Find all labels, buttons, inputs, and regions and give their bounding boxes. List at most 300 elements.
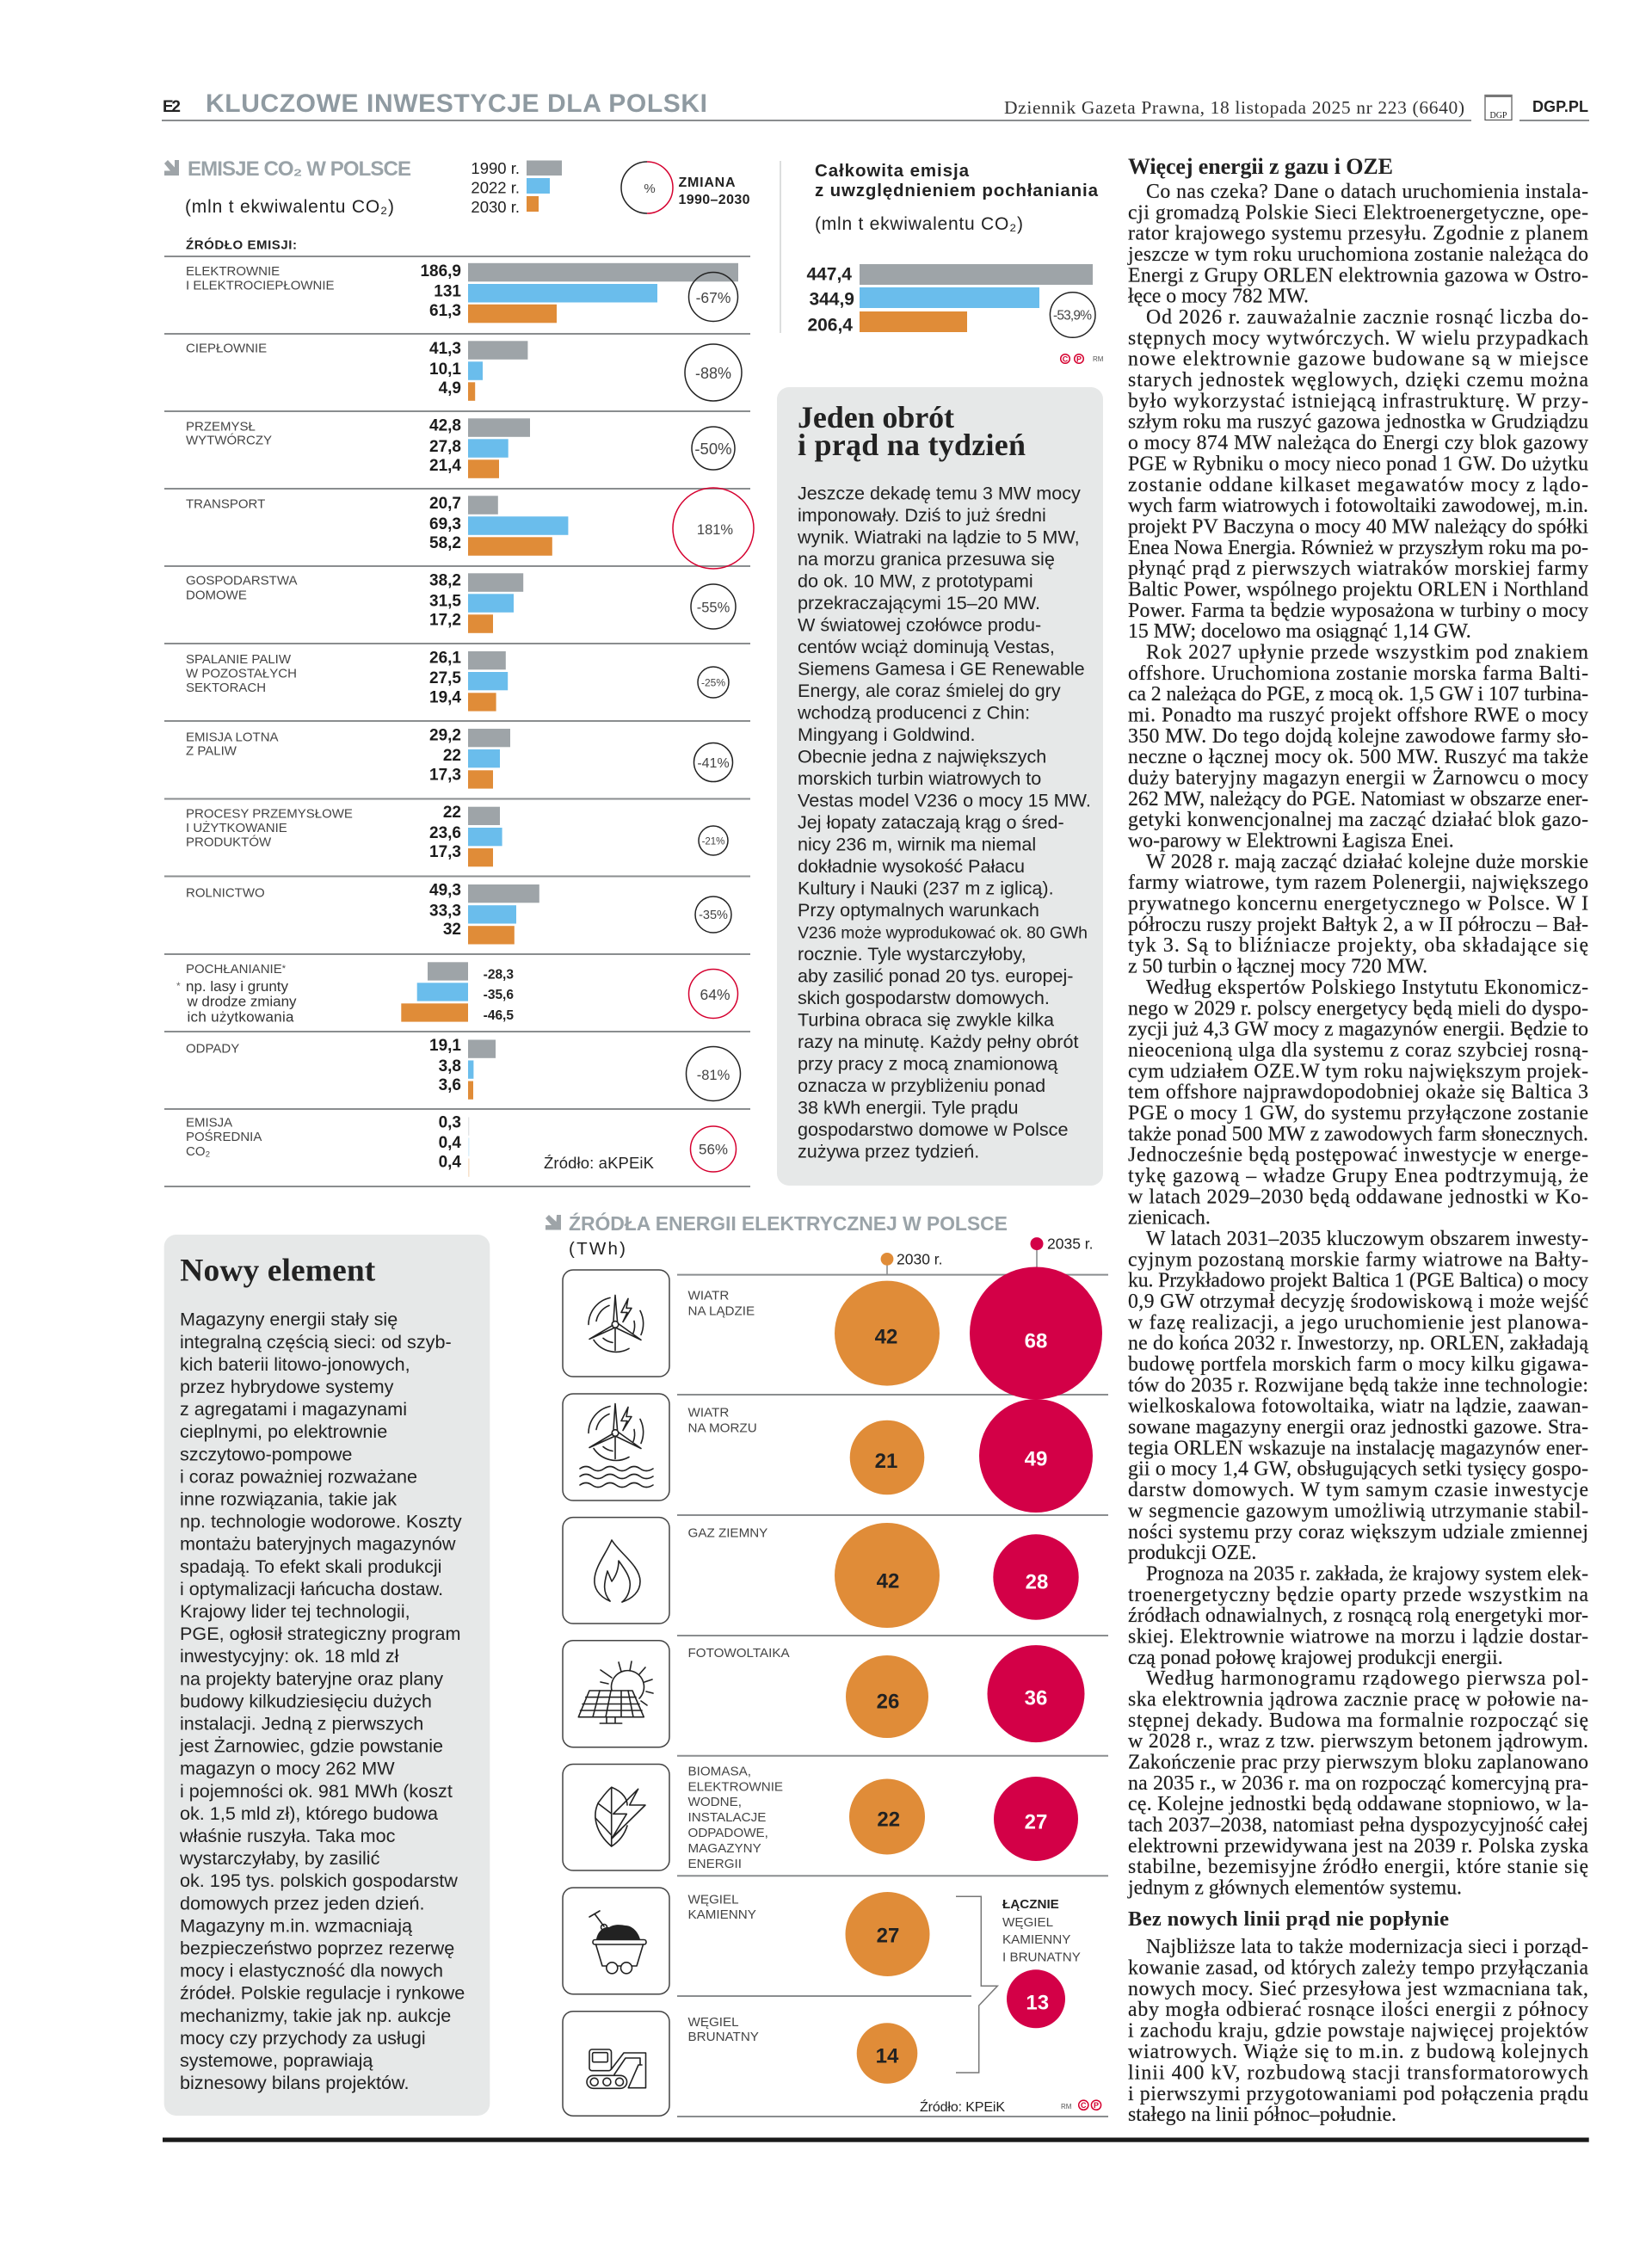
page header: DGP [1489, 111, 1507, 120]
article text: offshore. Uruchomiona zostanie morska farma Balti- [1128, 662, 1588, 685]
row labels: sources: GAZ ZIEMNY [688, 1526, 767, 1540]
row: przemysl: 42,8 [429, 417, 461, 435]
text: Nowy element body: na projekty bateryjne oraz plany [180, 1667, 443, 1689]
panel: Nowy element [164, 1235, 490, 2116]
article text: duży bateryjny magazyn energii w Żarnowcu o mocy [1128, 767, 1588, 790]
text: Nowy element body: i coraz poważniej rozważane [180, 1465, 417, 1487]
heading: total emission: Całkowita emisja [815, 161, 970, 181]
row: cieplownie: -88% [695, 365, 731, 382]
row: cieplownie: 10,1 [429, 360, 461, 379]
text: Jeden obrot body: Jeszcze dekadę temu 3 MW mocy [798, 483, 1081, 504]
legend: years [471, 159, 562, 216]
article text: mi. Ponadto ma ruszyć projekt offshore RWE o mocy [1128, 704, 1588, 726]
row labels: sources: BRUNATNY [688, 2030, 759, 2044]
article text: w fazę realizacji, a jego uruchomienie jest planowa- [1128, 1311, 1588, 1334]
bracket: coal total [956, 1896, 1081, 2073]
article text: ku. Przykładowo projekt Baltica 1 (PGE Baltica) o mocy [1128, 1270, 1588, 1292]
row: emisja lotna: 29,2 [429, 726, 461, 745]
text: Nowy element body: bezpieczeństwo poprzez rezerwę [180, 1938, 454, 1958]
row: pochlanianie: * [282, 964, 287, 974]
copyright marks: RM [1061, 2103, 1072, 2111]
article text: w latach 2029–2030 będą oddawane jednostki w Ko- [1128, 1186, 1588, 1208]
text: Jeden obrot body: centów wciąż dominują Vestas, [798, 636, 1055, 657]
article text: tykę gazową – władze Grupy Enea podtrzymują, że [1128, 1165, 1588, 1187]
article text: farmy wiatrowe, tym razem Polenergii, największego [1128, 872, 1588, 894]
article text: Energi z Grupy ORLEN elektrownia gazowa w Ostro- [1128, 264, 1588, 287]
article text: final section: Najbliższe lata to także modernizacja sieci i porząd- [1146, 1936, 1588, 1958]
row: rolnictwo: 33,3 [429, 902, 461, 921]
article text: final section: i pierwszymi przygotowaniami pod połączenia prądu [1128, 2083, 1588, 2105]
panel: CO2 emissions in Poland [164, 157, 754, 1186]
article text: skiej. Elektrownie wiatrowe na morzu i lądzie dostar- [1128, 1626, 1588, 1648]
legend: 2035 [1031, 1235, 1094, 1268]
article text: łęce o mocy 782 MW. [1128, 286, 1309, 308]
page header: DGP.PL [1532, 98, 1588, 115]
article text: 350 MW. Do tego dojdą kolejne zawodowe farmy sło- [1128, 725, 1588, 748]
text: Nowy element body: inne rozwiązania, takie jak [180, 1488, 397, 1509]
article text: final section: wiatrowych. Wiąże się to m.in. z budową kolejnych [1128, 2041, 1588, 2063]
text: Nowy element body: jest Żarnowiec, gdzie powstanie [179, 1735, 443, 1757]
row labels: sources: WĘGIEL [688, 1893, 739, 1907]
text: Nowy element body: systemowe, poprawiają [180, 2049, 373, 2071]
legend: 2030: 2030 r. [897, 1251, 943, 1268]
article text: troenergetyczny będzie oparty przede wszystkim na [1128, 1584, 1588, 1606]
copyright marks [1061, 354, 1104, 363]
text: Nowy element body: i optymalizacji łańcucha dostaw. [180, 1578, 443, 1599]
article text: czą ponad połowę krajowej produkcji energii. [1128, 1647, 1503, 1669]
row: odpady: 19,1 [429, 1037, 461, 1055]
row: pochlanianie [176, 962, 738, 1026]
text: Nowy element body: ok. 1,5 mld zł), którego budowa [180, 1802, 439, 1824]
row: odpady: 3,8 [439, 1057, 461, 1075]
icon: biomass leaf and bolt [563, 1764, 669, 1870]
text: Jeden obrot body: nicy 236 m, wirnik ma niemal [798, 834, 1036, 855]
row: elektrownie: ELEKTROWNIE [186, 264, 280, 279]
row: elektrownie: I ELEKTROCIEPŁOWNIE [186, 278, 335, 293]
row: emisja posrednia [186, 1113, 737, 1177]
row: procesy przemyslowe: PRODUKTÓW [186, 835, 272, 850]
change circle: -53,9% [1053, 308, 1092, 324]
article text: było wykorzystać istniejącą infrastrukturę. W przy- [1128, 390, 1588, 412]
row: elektrownie [186, 262, 738, 323]
page header: E2 [163, 98, 181, 116]
article text: tem offshore najprawdopodobniej okaże się Baltica 3 [1128, 1081, 1588, 1104]
row: cieplownie: 4,9 [439, 379, 461, 397]
row: przemysl: -50% [694, 440, 732, 458]
row: spalanie paliw: W POZOSTAŁYCH [186, 666, 297, 681]
row: pochlanianie: * [176, 980, 181, 992]
row: pochlanianie: w drodze zmiany [186, 993, 297, 1010]
article text: getyki konwencjonalnej ma zacząć działać blok gazo- [1128, 809, 1588, 831]
bars: total [806, 264, 1093, 336]
article text: jednym z głównych elementów systemu. [1127, 1877, 1462, 1900]
text: Jeden obrot body: oznacza w przybliżeniu ponad [798, 1075, 1045, 1096]
text: Jeden obrot body: razy na minutę. Każdy pełny obrót [798, 1031, 1078, 1052]
bubbles: 2030: 21 [875, 1450, 897, 1473]
row: przemysl: PRZEMYSŁ [186, 420, 256, 434]
row: gospodarstwa domowe: -55% [697, 601, 730, 616]
row: emisja lotna: 22 [443, 747, 461, 765]
text: Nowy element body: z agregatami i magazynami [180, 1398, 407, 1420]
article text: wielkoskalowa fotowoltaika, wiatr na lądzie, zaawan- [1128, 1396, 1588, 1418]
row labels: sources: WĘGIEL [688, 2015, 739, 2030]
row labels: sources: ENERGII [688, 1857, 742, 1871]
bracket: coal total: ŁĄCZNIE [1002, 1897, 1059, 1912]
row: transport: 58,2 [429, 534, 461, 552]
article text: cym udziałem OZE.W tym roku największym projek- [1128, 1060, 1588, 1082]
article text: produkcji OZE. [1128, 1542, 1256, 1564]
article text: ca 2 należąca do PGE, z mocą ok. 1,5 GW i 107 turbina- [1128, 683, 1588, 706]
icon: natural gas flame [563, 1518, 669, 1624]
text: Nowy element body: mechanizmy, takie jak np. aukcje [180, 2005, 451, 2026]
article text: W 2028 r. mają zacząć działać kolejne duże morskie [1146, 851, 1588, 873]
article text: W latach 2031–2035 kluczowym obszarem inwesty- [1146, 1228, 1588, 1250]
legend: years: 2022 r. [471, 179, 520, 196]
article text: wo-parowy w Elektrowni Łagisza Enei. [1128, 829, 1454, 852]
row: emisja lotna: -41% [697, 756, 730, 771]
text: Jeden obrot body: 38 kWh energii. Tyle prądu [798, 1097, 1018, 1118]
article text: final section: i zachodu kraju, gdzie powstaje najwięcej projektów [1128, 2020, 1589, 2043]
article text: Od 2026 r. zauważalnie zacznie rosnąć liczba do- [1146, 306, 1588, 329]
bracket: coal total: WĘGIEL [1002, 1915, 1053, 1930]
article text: PGE w Rybniku o mocy nieco ponad 1 GW. Do użytku [1128, 453, 1588, 475]
article text: tegia ORLEN wskazuje na instalację magazynów ener- [1128, 1437, 1588, 1459]
bubbles: 2035: 28 [1026, 1571, 1048, 1593]
article text: Enea Nowa Energia. Również w przyszłym roku ma po- [1128, 537, 1588, 559]
row: przemysl: WYTWÓRCZY [186, 434, 272, 447]
row: cieplownie [186, 340, 742, 401]
text: Nowy element body: ok. 195 tys. polskich gospodarstw [180, 1870, 458, 1891]
article text: 15 MW; docelowo ma osiągnąć 1,14 GW. [1128, 620, 1471, 643]
text: Nowy element body: źródeł. Polskie regulacje i rynkowe [180, 1982, 465, 2004]
row: emisja posrednia: POŚREDNIA [186, 1129, 262, 1144]
article text: 0,9 GW otrzymał decyzję środowiskową i może wejść [1128, 1291, 1588, 1313]
row labels: sources: BIOMASA, [688, 1764, 751, 1779]
article text: ne do końca 2032 r. Inwestorzy, np. ORLEN, zakładają [1128, 1333, 1588, 1355]
text: Nowy element body: np. technologie wodorowe. Koszty [180, 1511, 462, 1532]
heading: Jeden obrot: i prąd na tydzień [798, 428, 1026, 462]
row: procesy przemyslowe: PROCESY PRZEMYSŁOWE [186, 807, 353, 821]
article text: zycji już 4,3 GW mocy z magazynów energii. Będzie to [1128, 1019, 1588, 1041]
text: Nowy element body: mocy i elastyczność dla nowych [180, 1960, 443, 1981]
row: transport: TRANSPORT [186, 497, 265, 511]
row: cieplownie: 41,3 [429, 340, 461, 358]
article text: w 2028 r., wraz z tzw. pierwszym betonem jądrowym. [1128, 1730, 1588, 1753]
bubbles: 2035 [970, 1266, 1102, 2028]
article text: Prognoza na 2035 r. zakłada, że krajowy system elek- [1146, 1562, 1588, 1585]
article text: nego w 2029 r. polscy energetycy będą mieli do dyspo- [1128, 997, 1588, 1020]
row: elektrownie: 131 [434, 282, 461, 301]
text: Nowy element body: montażu bateryjnych magazynów [180, 1533, 456, 1555]
text: Jeden obrot body: Mingyang i Goldwind. [798, 724, 975, 745]
row labels: sources: ELEKTROWNIE [688, 1779, 783, 1794]
article text: w segmencie gazowym umożliwią utrzymanie stabil- [1128, 1500, 1588, 1522]
article text: neczne o łącznej mocy ok. 500 MW. Ruszyć ma także [1128, 746, 1588, 768]
row: spalanie paliw: 27,5 [429, 669, 461, 687]
row: transport: 69,3 [429, 515, 461, 533]
article text: final section: linii 400 kV, rozbudową stacji transformatorowych [1128, 2061, 1588, 2084]
article text: tów do 2035 r. Rozwijane będą także inne technologie: [1128, 1374, 1588, 1396]
article text: stępnych mocy wytwórczych. W wielu przypadkach [1128, 327, 1588, 349]
row: spalanie paliw: SEKTORACH [186, 681, 266, 695]
row: procesy przemyslowe: 17,3 [429, 843, 461, 861]
text: Nowy element body: Krajowy lider tej technologii, [180, 1600, 410, 1622]
article text: zienicach. [1128, 1207, 1211, 1229]
legend: percent change: % [644, 182, 656, 196]
row: spalanie paliw: SPALANIE PALIW [186, 652, 292, 667]
row: procesy przemyslowe: 22 [443, 804, 461, 822]
article text: 262 MW, należący do PGE. Natomiast w obszarze ener- [1128, 788, 1588, 810]
bubbles: 2030: 22 [877, 1809, 900, 1831]
row: pochlanianie: 64% [700, 986, 730, 1003]
text: Jeden obrot body: skich gospodarstw domowych. [798, 987, 1050, 1008]
article text: final section [1128, 1936, 1589, 2126]
heading: emissions: EMISJE CO₂ W POLSCE [188, 157, 411, 181]
heading: Jeden obrot [798, 400, 1026, 462]
row: pochlanianie: -35,6 [484, 988, 514, 1002]
change circle [1050, 293, 1095, 337]
bubbles: 2035: 27 [1025, 1810, 1047, 1834]
bubbles: 2030: 27 [877, 1924, 899, 1948]
text: Jeden obrot body: morskich turbin wiatrowych to [798, 767, 1041, 789]
article text: także ponad 500 MW z zawodowych farm słonecznych. [1128, 1123, 1588, 1145]
row: emisja posrednia: 0,4 [439, 1154, 461, 1172]
text: Nowy element body: i pojemności ok. 981 MWh (koszt [180, 1780, 453, 1802]
row: procesy przemyslowe: I UŻYTKOWANIE [186, 820, 287, 835]
article text: stępnej dekady. Budowa ma formalnie rozpocząć się [1128, 1710, 1588, 1732]
article text: cę. Kolejne jednostki będą oddawane stopniowo, w la- [1128, 1793, 1588, 1815]
article heading: Więcej energii z gazu i OZE [1128, 154, 1393, 179]
row labels: sources: ODPADOWE, [688, 1826, 768, 1840]
row labels: sources: FOTOWOLTAIKA [688, 1646, 791, 1661]
heading: total emission: z uwzględnieniem pochłaniania [815, 181, 1099, 200]
copyright marks [1061, 2100, 1101, 2111]
article text: final section: kowanie zasad, od których zależy tempo przyłączania [1128, 1956, 1588, 1979]
article text: final section: nowych mocy. Sieć przesyłowa jest wzmacniana tak, [1128, 1978, 1588, 2000]
text: Nowy element body: spadają. To efekt skali produkcji [180, 1556, 441, 1577]
row: odpady: 3,6 [439, 1076, 461, 1094]
row: transport: 20,7 [429, 495, 461, 513]
text: Nowy element body: mocy czy przychody za usługi [180, 2027, 426, 2049]
article text: budowę portfela morskich farm o mocy kilku gigawa- [1128, 1353, 1588, 1376]
copyright marks: P [1076, 354, 1082, 363]
icon: coal cart [563, 1888, 669, 1994]
text: Nowy element body: kich baterii litowo-jonowych, [180, 1353, 410, 1375]
panel: electricity sources [546, 1211, 1108, 2117]
article text: z 50 turbin o łącznej mocy 720 MW. [1128, 956, 1427, 978]
article text: sowane magazyny energii oraz jednostki gazowe. Stra- [1128, 1416, 1588, 1439]
text: Nowy element body: przez hybrydowe systemy [180, 1376, 394, 1397]
text: Jeden obrot body: Jej łopaty zataczają krąg o śred- [798, 811, 1064, 833]
text: Jeden obrot body: aby zasilić ponad 20 tys. europej- [798, 965, 1074, 987]
legend: percent change: 1990–2030 [678, 193, 750, 207]
page header: KLUCZOWE INWESTYCJE DLA POLSKI [206, 89, 707, 118]
bubbles: 2030: 26 [877, 1690, 899, 1714]
text: Jeden obrot body: przekraczającymi 15–20 MW. [798, 592, 1040, 613]
text: Nowy element body: instalacji. Jedną z pierwszych [180, 1712, 423, 1735]
text: Jeden obrot body: Energy, ale coraz śmielej do gry [798, 680, 1061, 701]
text: Nowy element body: wystarczyłaby, by zasilić [179, 1847, 380, 1869]
row labels: sources: KAMIENNY [688, 1907, 756, 1922]
text: Jeden obrot body: przy pracy z mocą znamionową [798, 1053, 1058, 1075]
article text: szłym roku ma ruszyć gazowa jednostka w Grudziądzu [1128, 411, 1588, 434]
row: emisja posrednia: EMISJA [186, 1115, 232, 1131]
article text: final section: aby mogła odbierać rosnące ilości energii z północy [1128, 1999, 1588, 2021]
row: gospodarstwa domowe: DOMOWE [186, 588, 247, 602]
bubbles: 2035: 13 [1026, 1991, 1049, 2015]
row: odpady: -81% [697, 1068, 730, 1083]
text: Nowy element body: domowych przez jeden dzień. [180, 1892, 424, 1913]
panel: Jeden obrot [777, 387, 1103, 1186]
text: Nowy element body: inwestycyjny: ok. 18 mld zł [180, 1645, 399, 1667]
text: Jeden obrot body: imponowały. Dziś to już średni [798, 504, 1046, 526]
article text: starych jednostek węglowych, dzięki czemu można [1128, 369, 1588, 391]
row: emisja lotna: 17,3 [429, 766, 461, 784]
bubbles: 2030: 42 [877, 1569, 899, 1593]
row: emisja lotna [186, 726, 733, 789]
article text: Rok 2027 upłynie przede wszystkim pod znakiem [1146, 642, 1588, 664]
icon: solar panel [563, 1641, 669, 1747]
text: Nowy element body: integralną częścią sieci: od szyb- [180, 1331, 452, 1353]
row labels: sources: MAGAZYNY [688, 1841, 761, 1856]
icon: offshore wind [563, 1394, 669, 1500]
article text: stabilne, bezemisyjne źródło energii, które stanie się [1128, 1856, 1588, 1878]
article text: PGE o mocy 1 GW, do systemu przyłączone zostanie [1128, 1102, 1588, 1125]
row: emisja lotna: EMISJA LOTNA [186, 730, 279, 745]
row labels: sources: WIATR [688, 1406, 729, 1420]
row: rolnictwo: ROLNICTWO [186, 886, 265, 900]
text: Nowy element body: cieplnymi, po elektrownie [180, 1420, 387, 1442]
row: gospodarstwa domowe: 17,2 [429, 611, 461, 630]
article text: płynąć prąd z pierwszych wiatraków morskiej farmy [1128, 558, 1588, 580]
heading: emissions [164, 157, 411, 217]
article column [1127, 154, 1589, 2126]
bubbles: 2035: 68 [1025, 1330, 1047, 1353]
page header [162, 89, 1589, 120]
text: Nowy element body: PGE, ogłosił strategiczny program [180, 1623, 460, 1644]
article text: ska elektrownia jądrowa zacznie pracę w połowie na- [1128, 1688, 1588, 1710]
row: przemysl: 21,4 [429, 457, 461, 475]
article text: Co nas czeka? Dane o datach uruchomienia instala- [1146, 181, 1588, 203]
legend: percent change [621, 162, 750, 213]
row: odpady [186, 1037, 740, 1101]
article text: cyjnym pozostaną morskie farmy wiatrowe na Bałty- [1128, 1248, 1588, 1271]
copyright marks: C [1081, 2101, 1087, 2110]
heading: emissions: (mln t ekwiwalentu CO₂) [185, 197, 394, 217]
copyright marks: P [1094, 2101, 1099, 2110]
text: Jeden obrot body: Kultury i Nauki (237 m z iglicą). [798, 878, 1054, 899]
article text: tyk 3. Są to bliźniacze projekty, oba składające się [1128, 934, 1588, 957]
article text: Według ekspertów Polskiego Instytutu Ekonomicz- [1146, 977, 1588, 999]
text: Nowy element body: biznesowy bilans projektów. [180, 2072, 409, 2093]
row: gospodarstwa domowe [186, 572, 736, 633]
legend: years: 2030 r. [471, 198, 520, 216]
bars: total: 447,4 [806, 265, 852, 284]
text: Nowy element body: Magazyny m.in. wzmacniają [180, 1914, 413, 1936]
row: spalanie paliw [186, 649, 729, 712]
article text: tach 2037–2038, natomiast pełna dyspozycyjność całej [1128, 1814, 1588, 1836]
legend: 2030 [881, 1251, 943, 1275]
heading: Nowy element: Nowy element [180, 1253, 376, 1288]
copyright marks: C [1063, 354, 1069, 363]
row: rolnictwo: 32 [443, 921, 461, 939]
article text: źródłach odnawialnych, z rosnącą rolą energetyki mor- [1128, 1605, 1588, 1627]
article text: gii o mocy 1,4 GW, obsługujących setki tysięcy gospo- [1128, 1458, 1588, 1481]
row: elektrownie: 61,3 [429, 302, 461, 320]
row: procesy przemyslowe: -21% [702, 836, 724, 847]
legend: years: 1990 r. [471, 159, 520, 177]
text: Jeden obrot body: zużywa przez tydzień. [798, 1141, 979, 1162]
text: Jeden obrot body: na morzu granica przesuwa się [798, 548, 1055, 570]
article text: o mocy 874 MW należąca do Energi czy blok gazowy [1128, 432, 1588, 454]
row: spalanie paliw: -25% [701, 676, 725, 688]
row: elektrownie: -67% [696, 289, 730, 306]
text: Jeden obrot body: wchodzą producenci z Chin: [797, 702, 1030, 724]
row: spalanie paliw: 26,1 [429, 649, 461, 668]
row: elektrownie: 186,9 [420, 262, 461, 280]
article text: elektrowni przewidywana jest na 2039 r. Polska zyska [1128, 1835, 1588, 1858]
row labels: sources: NA LĄDZIE [688, 1304, 755, 1318]
icon: excavator [563, 2012, 669, 2116]
heading: total emission [815, 161, 1099, 234]
text: Jeden obrot body [797, 483, 1091, 1162]
text: Jeden obrot body: Przy optymalnych warunkach [798, 899, 1039, 921]
row: emisja posrednia: CO₂ [186, 1144, 210, 1159]
panel: CO2 emissions in Poland: ŹRÓDŁO EMISJI: [186, 237, 297, 253]
bubbles: 2035: 36 [1025, 1686, 1047, 1710]
row: emisja posrednia: 0,4 [439, 1134, 461, 1152]
article text: Zakończenie prac przy pierwszym bloku zaplanowano [1128, 1752, 1588, 1774]
source note: Źródło: aKPEiK [544, 1154, 655, 1172]
heading: Jeden obrot: Jeden obrót [798, 400, 954, 434]
heading: electricity sources: (TWh) [569, 1239, 626, 1259]
row: rolnictwo: 49,3 [429, 881, 461, 899]
source note: Źródło: KPEiK [920, 2098, 1005, 2115]
article text: rator krajowego systemu przesyłu. Zgodnie z planem [1128, 223, 1588, 245]
text: Jeden obrot body: V236 może wyprodukować ok. 80 GWh [798, 924, 1088, 943]
bracket: coal total: I BRUNATNY [1002, 1950, 1081, 1965]
row: rolnictwo: -35% [699, 909, 728, 922]
text: Nowy element body [179, 1309, 465, 2093]
row: rolnictwo [186, 881, 731, 945]
row: pochlanianie: np. lasy i grunty [186, 978, 289, 995]
row: przemysl [186, 417, 735, 478]
article text: darstw domowych. W tym samym czasie inwestycje [1128, 1479, 1588, 1501]
text: Nowy element body: magazyn o mocy 262 MW [180, 1758, 395, 1779]
row labels: sources: WODNE, [688, 1795, 742, 1809]
text: Jeden obrot body: W światowej czołówce produ- [798, 614, 1041, 636]
text: Nowy element body: budowy kilkudziesięciu dużych [180, 1690, 432, 1711]
row: gospodarstwa domowe: 38,2 [429, 572, 461, 590]
text: Jeden obrot body: wynik. Wiatraki na lądzie to 5 MW, [797, 527, 1080, 548]
row: pochlanianie: -46,5 [484, 1008, 514, 1023]
article text: jeszcze w tym roku uruchomiona zostanie należąca do [1127, 243, 1588, 266]
heading: electricity sources [546, 1211, 1008, 1259]
row: emisja lotna: Z PALIW [186, 743, 237, 759]
bars: total: 344,9 [809, 289, 854, 310]
row: emisja posrednia: 0,3 [439, 1113, 461, 1131]
bubbles: 2030: 42 [875, 1325, 897, 1349]
row: pochlanianie: -28,3 [484, 967, 514, 983]
article subheading: Bez nowych linii prąd nie popłynie [1128, 1907, 1449, 1931]
row: pochlanianie: POCHŁANIANIE [186, 962, 282, 977]
row: odpady: ODPADY [186, 1042, 239, 1057]
legend: percent change: ZMIANA [678, 176, 736, 190]
copyright marks: RM [1093, 355, 1104, 363]
page header: Dziennik Gazeta Prawna, 18 listopada 2025 nr 223 (6640) [1004, 97, 1464, 118]
bubbles: 2030 [835, 1281, 940, 2084]
row: gospodarstwa domowe: 31,5 [429, 592, 461, 611]
